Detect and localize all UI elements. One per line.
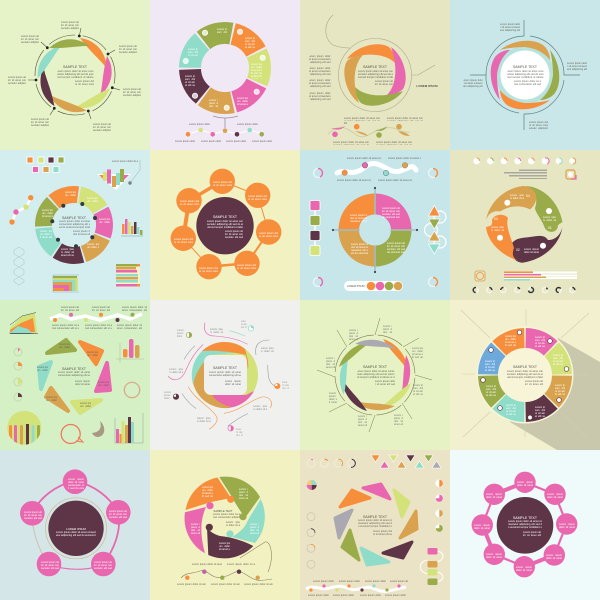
heading: SAMPLE TEXT [63,65,87,69]
chart: nodes, ring and center [20,469,131,576]
heading: SAMPLE TEXT [513,516,537,520]
heading: SAMPLE TEXT [62,216,86,220]
chart: swirl, rounded square and curves [168,322,280,432]
panel: swirl with rounded square [150,300,300,450]
panel: pink eight node cycle [450,450,600,600]
chart: hooked segments and timeline [180,476,272,581]
chart: triangles, icons and swatches [305,454,444,593]
step number 03: 03 [494,217,498,221]
step numbers: 01 [344,122,347,125]
chart: triangles and mini charts [7,312,144,445]
panel: eight segment donut with long shadow [450,300,600,450]
heading: SAMPLE TEXT [213,366,237,370]
panel: five part hooked circle [150,450,300,600]
panel: seven blade ring [0,0,150,150]
pill label: LOREM IPSUM [347,284,365,288]
panel: orange seven node cycle [150,150,300,300]
chart: nodes, ring and center [472,472,578,578]
heading: SAMPLE TEXT [213,508,233,512]
chart: blades, arcs and pointers [28,28,120,120]
chart: arrows and icon rows [472,157,577,294]
heading: SAMPLE TEXT [363,514,387,518]
step number 02: 02 [516,248,520,252]
panel: quadrant donut [300,150,450,300]
heading: SAMPLE TEXT [513,65,537,69]
wave caption: Lorem ipsum dolor sit amet elit [92,306,110,312]
step number 04: 04 [526,194,530,198]
panel: four blade swirl with white center [450,0,600,150]
chart: donut and mini charts [9,156,143,292]
heading: SAMPLE TEXT [213,214,237,218]
panel: eight blade ring with spokes [300,300,450,450]
wave caption: Lorem ipsum dolor sit amet consectetur elit [122,306,147,312]
center heading: LOREM IPSUM [66,527,86,531]
panel: eight rounded triangles [300,450,450,600]
wave caption: Lorem ipsum dolor sit amet elit [61,306,79,312]
panel: four blade swirl with lorem ipsum [300,0,450,150]
chart: quadrants, wave, swatches, triangles [310,161,446,291]
chart: shadow, spokes and segments [461,309,600,450]
panel: rounded triangles with charts [0,300,150,450]
panel: donut with small charts [0,150,150,300]
callout 10: Lorem ipsum dolor [177,329,184,338]
step number 01: 01 [548,226,552,230]
heading: SAMPLE TEXT [62,366,86,370]
chart: white circle, blades and outline [470,20,580,130]
callout 08: Lorem ipsum dolor [164,391,171,400]
chart: nodes and connecting ring [170,168,282,280]
label: LOREM IPSUM [416,84,438,88]
chart: blades, ring and spokes [317,318,432,432]
heading: SAMPLE TEXT [363,365,387,369]
panel: segmented donut with timeline [150,0,300,150]
panel: interlocking arrows cycle [450,150,600,300]
chart: donut segments and timeline [179,22,271,137]
heading: SAMPLE TEXT [363,65,387,69]
panel: pink five node cycle [0,450,150,600]
heading: SAMPLE TEXT [513,365,537,369]
chart: blades, outline and wave [326,14,435,138]
arrow 02 text: Lorem ipsum dolor sit amet [524,248,539,254]
